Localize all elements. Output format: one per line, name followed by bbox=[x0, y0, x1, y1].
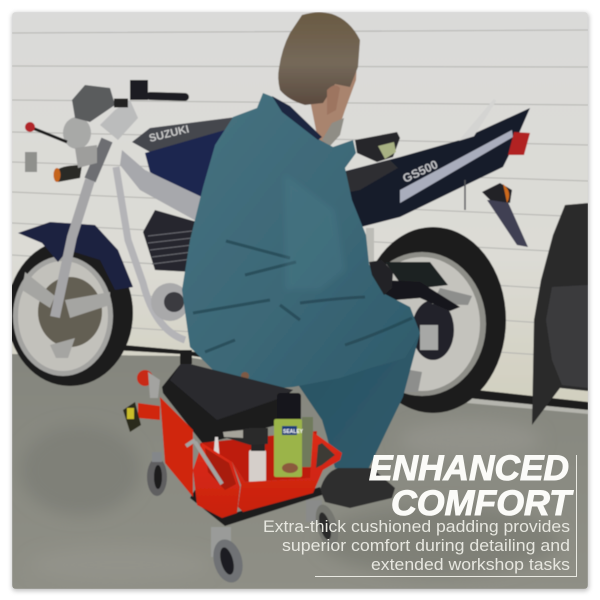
mechanic bbox=[182, 12, 420, 508]
description text: extended workshop tasks bbox=[371, 556, 570, 574]
socket wrench bbox=[186, 440, 222, 484]
front fork bbox=[90, 140, 107, 180]
coverall torso and thigh bbox=[182, 93, 420, 390]
heading: ENHANCED bbox=[369, 449, 569, 488]
hex keys bbox=[137, 370, 160, 398]
tape measure bbox=[123, 402, 141, 432]
lower glove bbox=[369, 260, 393, 295]
front wheel bbox=[7, 240, 133, 386]
head bbox=[278, 12, 360, 146]
shoe bbox=[320, 468, 395, 508]
red side panel bbox=[160, 397, 193, 497]
tray interior bbox=[200, 431, 317, 482]
fuel tank bbox=[132, 117, 236, 152]
tank logo: SUZUKI bbox=[148, 123, 190, 145]
description text bbox=[263, 518, 570, 574]
front fender bbox=[18, 222, 133, 290]
heading bbox=[369, 449, 574, 523]
tail section: GS500 bbox=[400, 157, 440, 186]
garage door wall bbox=[12, 12, 588, 422]
large red bin bbox=[232, 432, 342, 512]
right caster bbox=[316, 504, 338, 547]
torch bbox=[223, 428, 268, 445]
description text: superior comfort during detailing and bbox=[282, 537, 570, 555]
frame tube bbox=[116, 167, 185, 340]
swingarm bbox=[383, 280, 460, 311]
second spray can bbox=[302, 417, 313, 467]
description text: Extra-thick cushioned padding provides bbox=[263, 518, 570, 536]
creeper stool bbox=[123, 350, 342, 586]
headlight and dash bbox=[63, 117, 91, 149]
coverall lower leg bbox=[297, 307, 420, 472]
spray can bbox=[274, 393, 304, 477]
motorcycle bbox=[7, 80, 530, 413]
tail section bbox=[342, 100, 530, 247]
upper glove bbox=[355, 132, 400, 162]
coverall folds bbox=[193, 241, 412, 352]
badge bbox=[241, 372, 249, 380]
engine bbox=[143, 210, 197, 321]
small bottle bbox=[212, 437, 224, 478]
small red bin bbox=[193, 443, 240, 518]
spray can in hand bbox=[378, 142, 396, 159]
cushion seat bbox=[162, 362, 293, 444]
rear wheel bbox=[376, 226, 507, 414]
black chair on the right bbox=[532, 203, 588, 425]
sleeve highlight bbox=[286, 256, 296, 266]
white bottle bbox=[249, 450, 266, 483]
collar bbox=[272, 96, 322, 140]
frame bbox=[190, 487, 322, 526]
heading: COMFORT bbox=[391, 484, 574, 523]
caption lines bbox=[315, 455, 576, 576]
front caster bbox=[211, 527, 243, 583]
floor bbox=[12, 337, 588, 589]
mirror stem bbox=[30, 127, 67, 142]
front indicator bbox=[55, 165, 82, 182]
spray can: SEALEY bbox=[283, 429, 304, 435]
rear caster bbox=[147, 452, 167, 496]
